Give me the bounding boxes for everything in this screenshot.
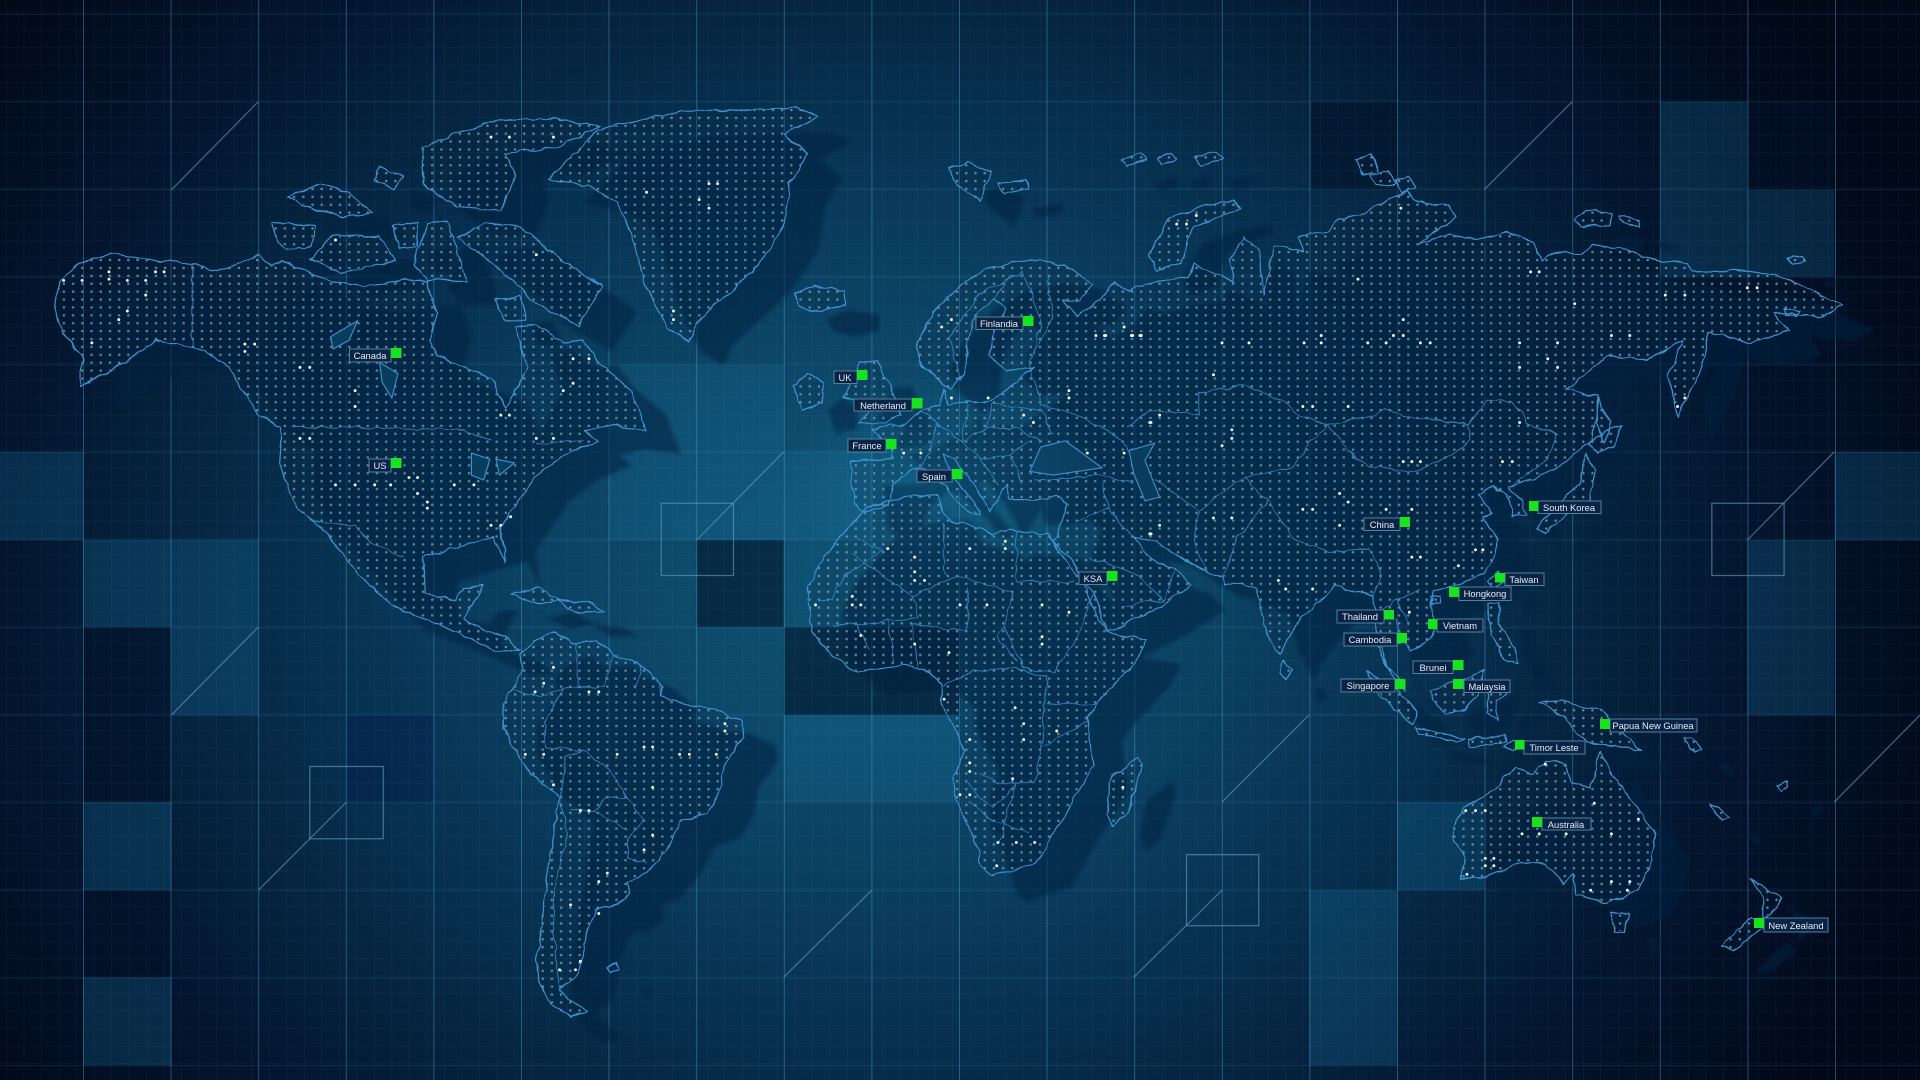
marker: New Zealand: New Zealand xyxy=(1768,920,1824,931)
marker: UK: UK xyxy=(838,372,852,383)
marker: Thailand xyxy=(1337,610,1394,623)
marker: Papua New Guinea: Papua New Guinea xyxy=(1612,720,1694,731)
marker: Australia xyxy=(1532,817,1591,830)
marker: US: US xyxy=(373,460,387,471)
marker: Timor Leste xyxy=(1515,740,1585,754)
marker: Spain: Spain xyxy=(922,471,946,482)
marker: South Korea xyxy=(1529,501,1601,514)
marker: KSA xyxy=(1079,571,1118,584)
marker: Hongkong: Hongkong xyxy=(1464,588,1506,599)
marker: Cambodia: Cambodia xyxy=(1349,634,1392,645)
highlighted city dots xyxy=(64,137,1757,970)
decorative diagonals and squares xyxy=(171,102,1920,977)
marker: KSA: KSA xyxy=(1084,573,1103,584)
marker: Taiwan xyxy=(1495,573,1544,586)
marker: Spain xyxy=(917,469,962,482)
marker: Malaysia: Malaysia xyxy=(1468,681,1506,692)
marker: UK xyxy=(834,370,868,384)
marker: Finlandia: Finlandia xyxy=(980,318,1019,329)
marker: Vietnam xyxy=(1428,619,1483,632)
marker: Brunei: Brunei xyxy=(1419,662,1447,673)
marker: Canada: Canada xyxy=(354,350,387,361)
marker: Singapore: Singapore xyxy=(1347,680,1389,691)
coastline outline xyxy=(54,108,1842,1018)
inland seas and lakes xyxy=(331,321,1160,501)
marker: Taiwan: Taiwan xyxy=(1509,574,1539,585)
marker: Timor Leste: Timor Leste xyxy=(1529,742,1579,753)
marker: US xyxy=(369,458,402,472)
marker: Netherland: Netherland xyxy=(860,400,906,411)
marker: China: China xyxy=(1370,519,1395,530)
marker: New Zealand xyxy=(1754,918,1828,932)
marker: Hongkong xyxy=(1449,587,1511,600)
country borders xyxy=(192,263,1558,991)
marker: Singapore xyxy=(1341,679,1406,692)
marker: Brunei xyxy=(1413,660,1464,674)
marker: France xyxy=(848,439,896,452)
marker: France: France xyxy=(852,440,882,451)
marker: Netherland xyxy=(854,398,922,411)
continents with dot matrix xyxy=(54,108,1842,1018)
marker: South Korea: South Korea xyxy=(1543,502,1596,513)
marker: Cambodia xyxy=(1344,633,1407,646)
marker: Vietnam: Vietnam xyxy=(1443,620,1477,631)
marker: China xyxy=(1364,517,1410,530)
marker: Thailand: Thailand xyxy=(1342,611,1378,622)
land shadow xyxy=(88,132,1876,1042)
marker: Canada xyxy=(350,348,402,362)
Europe glow xyxy=(784,367,1102,576)
marker: Malaysia xyxy=(1453,679,1510,692)
marker: Australia: Australia xyxy=(1548,819,1585,830)
marker: Finlandia xyxy=(976,316,1034,330)
